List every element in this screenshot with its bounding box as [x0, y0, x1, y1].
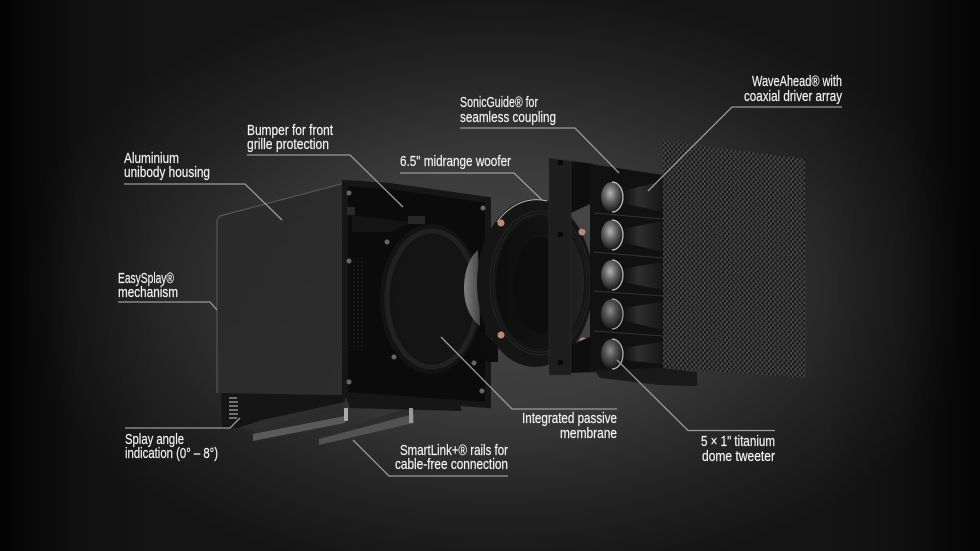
callout: SonicGuide: [460, 95, 619, 173]
callout: titanium dome tweeter: 5 × 1" titanium: [701, 434, 775, 450]
callout: bumper: [247, 123, 403, 207]
tweeter 5: [601, 339, 663, 369]
callout: WaveAhead: [648, 74, 843, 191]
callout: titanium dome tweeter: [617, 360, 775, 465]
tweeter 4: [594, 299, 663, 336]
callout: SmartLink+ rails: cable-free connection: [395, 457, 508, 473]
callout: titanium dome tweeter: dome tweeter: [702, 449, 775, 465]
callout: midrange woofer: [400, 154, 542, 200]
callout: EasySplay mechanism: mechanism: [118, 285, 178, 301]
front grille: [663, 140, 806, 378]
tweeter 3: [594, 260, 663, 296]
callout: bumper: grille protection: [247, 137, 329, 153]
callout: SmartLink+ rails: [353, 440, 508, 476]
tweeter 2: [594, 220, 663, 258]
tweeter 1: [594, 181, 663, 219]
callout: SmartLink+ rails: SmartLink+® rails for: [400, 443, 508, 459]
callout: integrated passive membrane: Integrated passive: [522, 411, 617, 427]
callout: splay angle indication: [125, 418, 240, 462]
callout: SonicGuide: seamless coupling: [460, 110, 556, 126]
callout: splay angle indication: indication (0° – 8°): [125, 446, 218, 462]
callout: bumper: Bumper for front: [247, 123, 333, 139]
callout: aluminium unibody housing: unibody housing: [124, 165, 210, 181]
callout: WaveAhead: coaxial driver array: [744, 89, 843, 105]
callout: midrange woofer: 6.5" midrange woofer: [400, 154, 511, 170]
housing side panel: [217, 183, 345, 395]
callout: EasySplay mechanism: EasySplay®: [118, 271, 174, 287]
rear speaker housing: [217, 183, 498, 445]
midrange woofer: [464, 199, 593, 367]
callout: integrated passive membrane: [441, 337, 617, 442]
callout: aluminium unibody housing: Aluminium: [124, 151, 179, 167]
callout: aluminium unibody housing: [124, 151, 282, 220]
passive membrane: [380, 224, 482, 374]
callout: EasySplay mechanism: [118, 271, 217, 310]
housing screws: [346, 190, 486, 394]
coaxial tweeter array: [594, 181, 663, 369]
housing front opening: [345, 183, 488, 405]
callout: integrated passive membrane: membrane: [560, 426, 617, 442]
callout: WaveAhead: WaveAhead® with: [752, 74, 842, 90]
waveguide baffle: [549, 158, 697, 386]
callout: SonicGuide: SonicGuide® for: [460, 95, 538, 111]
splay mechanism and rails: [221, 393, 462, 445]
callout: splay angle indication: Splay angle: [125, 432, 184, 448]
